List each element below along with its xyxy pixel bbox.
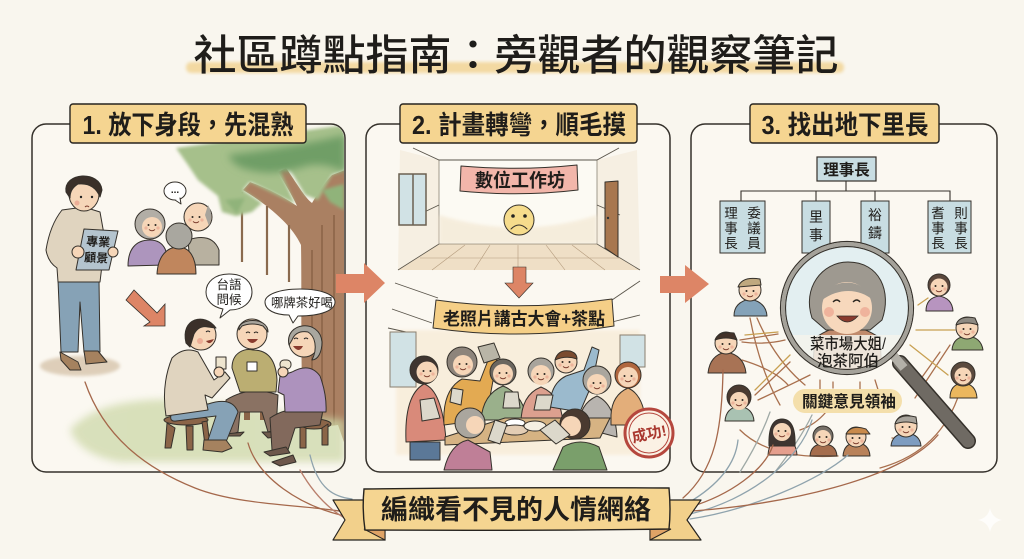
org chart: 議 [747, 220, 761, 236]
banner: digital workshop: 數位工作坊 [475, 170, 565, 191]
org chart: 裕 [868, 207, 882, 223]
org chart: 員 [747, 236, 761, 251]
clipboard: 專業 [86, 233, 111, 250]
panel: step 2 [366, 124, 673, 472]
influence network lines [740, 298, 962, 472]
speech bubble: tea question: 哪牌茶好喝 [271, 296, 333, 310]
step 1 heading [70, 104, 306, 143]
org chart: 理事長 [823, 160, 870, 179]
grass [70, 399, 345, 462]
surrounding community faces [708, 274, 983, 456]
label: key opinion leaders: 關鍵意見領袖 [802, 392, 896, 411]
table [445, 418, 610, 445]
banner: digital workshop [460, 165, 578, 194]
step 3 heading: 3. 找出地下里長 [762, 110, 928, 140]
org chart: 事 [954, 221, 968, 236]
org chart: 事 [931, 221, 945, 236]
lively room background [388, 281, 645, 455]
arrow: awkward to friendly [126, 290, 165, 326]
org chart [720, 157, 971, 253]
banner: old photo storytelling [433, 299, 614, 334]
clipboard: 顧景 [84, 250, 109, 266]
panel: step 1 [32, 124, 345, 472]
human network threads to ribbon [85, 370, 938, 520]
panel: step 3 [691, 124, 997, 472]
speech bubble: Taiwanese greeting [206, 274, 252, 318]
org chart: 委 [747, 206, 761, 221]
arrow: step 2 to step 3 [660, 265, 709, 303]
tree and canopy [176, 125, 345, 445]
empty workshop room [398, 148, 640, 270]
magnifying glass [780, 242, 968, 441]
speech bubble: Taiwanese greeting: 台語 [216, 277, 242, 292]
seated group having tea [164, 319, 331, 466]
banner: old photo storytelling: 老照片講古大會+茶點 [443, 309, 605, 329]
org chart: 則 [954, 206, 968, 221]
arrow: down [505, 267, 533, 298]
sparkle mark [978, 508, 1002, 532]
step 1 heading: 1. 放下身段，先混熟 [82, 110, 294, 140]
magnifier label: 泡茶阿伯 [817, 352, 879, 370]
step 2 heading: 2. 計畫轉彎，順毛摸 [412, 110, 626, 140]
label: key opinion leaders [793, 389, 902, 413]
org chart: 長 [954, 236, 968, 251]
clipboard [76, 229, 118, 270]
speech bubble: Taiwanese greeting: 問候 [216, 293, 242, 307]
org chart: 理 [724, 206, 738, 221]
standing young man with clipboard [40, 176, 120, 376]
bottom ribbon banner: 編織看不見的人情網絡 [381, 495, 651, 525]
org chart: 長 [724, 236, 738, 251]
org chart: 耆 [931, 206, 945, 221]
org chart: 鑄 [868, 225, 882, 241]
success stamp [625, 409, 673, 457]
icon: sad face [504, 205, 534, 235]
magnifier label [810, 334, 887, 370]
title: 社區蹲點指南：旁觀者的觀察筆記 [194, 32, 838, 79]
bottom ribbon banner [333, 488, 701, 540]
success stamp: 成功! [630, 422, 668, 446]
org chart: 長 [931, 236, 945, 251]
org chart: 事 [724, 221, 738, 236]
ellipsis speech bubble: ... [171, 185, 179, 196]
distant elder trio [128, 182, 219, 274]
arrow: step 1 to step 2 [336, 263, 385, 303]
speech bubble: tea question [265, 289, 335, 323]
org chart: 事 [809, 227, 823, 243]
happy crowd with old photos [406, 343, 646, 470]
magnifier label: 菜市場大姐/ [810, 334, 887, 353]
org chart: 里 [809, 209, 823, 225]
